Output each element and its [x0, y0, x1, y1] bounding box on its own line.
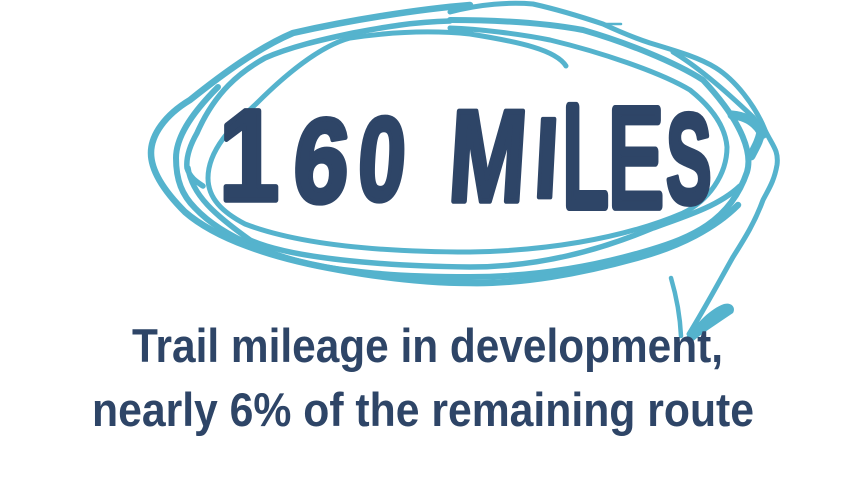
letter I: I — [532, 96, 561, 222]
third loop — [176, 20, 748, 277]
arrow head right barb — [684, 304, 734, 342]
arrow head left barb — [671, 278, 681, 336]
right knot blob — [732, 115, 761, 156]
digit 1: 1 — [219, 84, 279, 228]
upper right inner stroke — [673, 52, 764, 136]
headline: 160 MILES — [219, 76, 712, 237]
digit 6: 6 — [289, 95, 354, 228]
top spike — [600, 23, 621, 25]
letter E: E — [608, 81, 663, 236]
letter S: S — [666, 87, 712, 230]
digit 0: 0 — [354, 92, 410, 225]
scribbled ellipse with arrow — [151, 3, 777, 342]
top stroke with arrow shaft — [450, 3, 777, 334]
caption line 2: nearly 6% of the remaining route — [92, 383, 754, 436]
second loop — [187, 21, 740, 267]
letter M: M — [445, 83, 531, 229]
letter L: L — [562, 76, 608, 237]
outer loop — [151, 5, 738, 283]
caption — [92, 319, 754, 436]
caption line 1: Trail mileage in development, — [132, 319, 723, 372]
inner loop — [208, 28, 727, 252]
